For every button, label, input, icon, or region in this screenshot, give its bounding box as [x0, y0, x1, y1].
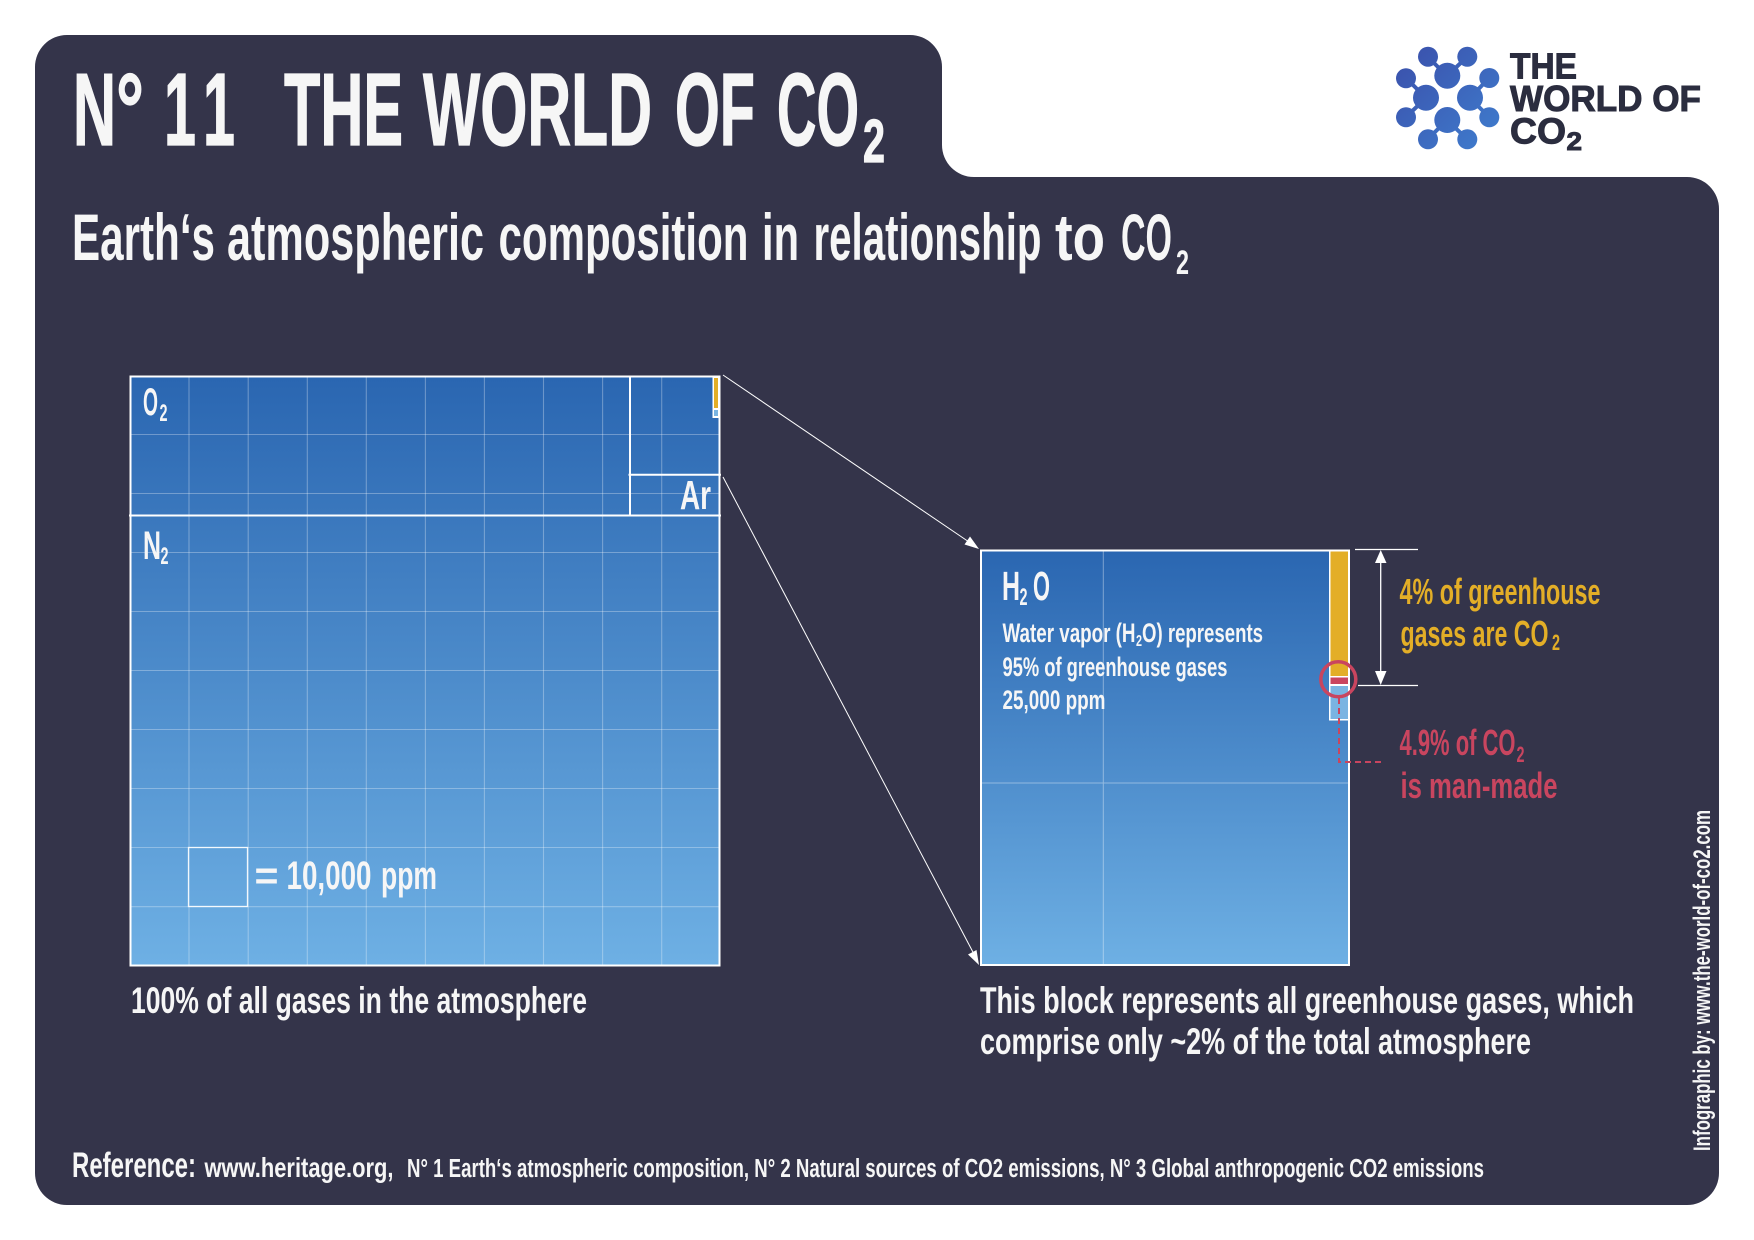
title: N: [73, 52, 116, 167]
chart: greenhouse gases block: [981, 550, 1349, 965]
caption: right block: comprise only ~2% of the total atmosphere: [980, 1021, 1531, 1062]
logo: The World of CO2: [1396, 46, 1701, 156]
legend: 10,000 ppm square: [188, 848, 437, 906]
title: 2: [863, 107, 885, 175]
label: N2: N: [143, 524, 161, 568]
title: CO: [777, 52, 859, 167]
label: H2O: H: [1002, 563, 1020, 609]
title: WORLD: [423, 52, 652, 167]
logo wordmark: WORLD OF: [1510, 78, 1701, 119]
subtitle: to: [1055, 200, 1105, 274]
subtitle: in: [762, 200, 799, 274]
callout: man-made highlight circle and dashed leader: [1321, 662, 1384, 762]
text: water vapor description: Water vapor (H: [1002, 618, 1136, 648]
logo wordmark: [1510, 46, 1701, 156]
callout text: 4% of greenhouse gases are CO2: gases are CO: [1400, 613, 1548, 654]
subtitle: CO: [1121, 200, 1172, 274]
text: water vapor description: 2: [1136, 633, 1142, 650]
footer: references: [72, 1146, 1484, 1185]
subtitle: 2: [1176, 244, 1189, 282]
icon: molecule network: [1396, 47, 1499, 149]
title: 1: [164, 52, 196, 167]
CO2 sliver in block: [712, 377, 719, 418]
label: H2O: O: [1033, 563, 1050, 609]
callout text: 4.9% of CO2 is man-made: is man-made: [1400, 765, 1558, 806]
dimension arrow: 4% bracket: [1355, 550, 1418, 686]
block gradient fill: [981, 550, 1349, 965]
label: H2O: 2: [1020, 584, 1028, 611]
title: OF: [675, 52, 755, 167]
logo wordmark: 2: [1566, 128, 1582, 156]
arrow: bottom zoom line: [723, 477, 979, 965]
callout text: 4.9% of CO2 is man-made: [1400, 722, 1558, 806]
label: O2: O: [143, 381, 158, 424]
label: N2: 2: [160, 543, 168, 570]
subtitle: Earth‘s: [72, 200, 215, 274]
caption: right block: [980, 980, 1634, 1062]
logo wordmark: CO: [1510, 110, 1566, 152]
chart: all gases block: [129, 376, 721, 966]
callout text: 4.9% of CO2 is man-made: 2: [1516, 742, 1524, 767]
subtitle: atmospheric: [227, 200, 484, 274]
callout text: 4% of greenhouse gases are CO2: 2: [1552, 630, 1560, 655]
title: 1: [203, 52, 235, 167]
callout text: 4% of greenhouse gases are CO2: [1400, 571, 1600, 655]
legend: 10,000 ppm square: ppm: [381, 854, 437, 898]
text: water vapor description: O) represents: [1142, 618, 1263, 648]
label: O2: 2: [160, 400, 168, 427]
text: water vapor description: 95% of greenhouse gases: [1002, 652, 1228, 682]
CO2 column: [1329, 550, 1349, 720]
label: H2O: [1002, 563, 1050, 611]
title: [73, 52, 885, 175]
title: THE: [284, 52, 403, 167]
callout text: 4% of greenhouse gases are CO2: 4% of greenhouse: [1400, 571, 1600, 612]
block gradient fill: [130, 376, 720, 966]
subtitle: relationship: [814, 200, 1042, 274]
caption: left block: 100% of all gases in the atmosphere: [131, 980, 587, 1021]
logo wordmark: THE: [1510, 46, 1577, 86]
subtitle: composition: [498, 200, 748, 274]
footer: references: www.heritage.org,: [204, 1152, 394, 1183]
footer: references: Reference:: [72, 1146, 196, 1185]
text: water vapor description: 25,000 ppm: [1002, 685, 1106, 715]
credit: vertical text: Infographic by: www.the-world-of-co2.com: [1689, 810, 1716, 1151]
label: Ar: Ar: [680, 472, 711, 518]
subtitle: [72, 200, 1189, 282]
arrow: top zoom line: [723, 375, 979, 549]
title: °: [116, 52, 144, 167]
text: water vapor description: [1002, 618, 1263, 715]
callout text: 4.9% of CO2 is man-made: 4.9% of CO: [1400, 722, 1516, 763]
legend: 10,000 ppm square: =: [254, 854, 278, 898]
legend: 10,000 ppm square: 10,000: [286, 854, 372, 898]
